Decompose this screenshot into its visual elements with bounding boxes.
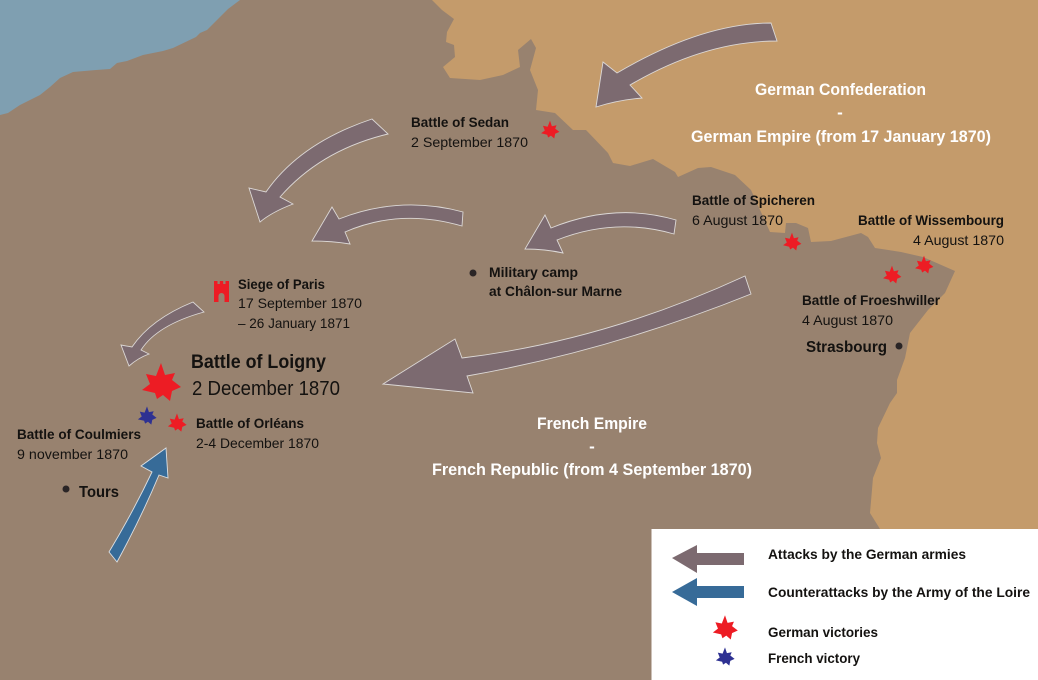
label: Battle of Orléans: Battle of Orléans bbox=[196, 415, 304, 431]
icon: Battle of Froeshwiller star bbox=[883, 266, 901, 283]
label: Battle of Orléans bbox=[196, 415, 319, 451]
label: German Confederation / Empire: German Confederation bbox=[755, 80, 926, 99]
map: sea bbox=[0, 0, 240, 115]
label: German Confederation / Empire bbox=[691, 80, 991, 146]
legend icon: counterattack arrow bbox=[672, 578, 744, 606]
icon: Battle of Coulmiers star bbox=[138, 406, 157, 425]
icon: Battle of Spicheren star bbox=[783, 233, 801, 250]
label: Battle of Coulmiers bbox=[17, 426, 141, 462]
label: Siege of Paris: – 26 January 1871 bbox=[238, 315, 350, 331]
legend icon: German victories star bbox=[713, 615, 738, 640]
legend text: counterattacks: Counterattacks by the Army of the Loire bbox=[768, 584, 1030, 600]
label: Battle of Wissembourg: Battle of Wissembourg bbox=[858, 212, 1004, 228]
map: German territory bbox=[432, 0, 1038, 529]
label: Strasbourg: Strasbourg bbox=[806, 339, 887, 356]
label: Battle of Froeshwiller bbox=[802, 292, 941, 328]
label: Battle of Orléans: 2-4 December 1870 bbox=[196, 435, 319, 451]
label: French Empire / Republic: French Republic (from 4 September 1870) bbox=[432, 460, 752, 479]
label: Siege of Paris: Siege of Paris bbox=[238, 276, 325, 292]
label: French Empire / Republic: - bbox=[589, 437, 595, 456]
label: Battle of Froeshwiller: 4 August 1870 bbox=[802, 312, 893, 328]
label: Battle of Coulmiers: 9 november 1870 bbox=[17, 446, 128, 462]
arrow: attack from Germany towards Sedan bbox=[596, 23, 777, 107]
label: Battle of Loigny: 2 December 1870 bbox=[192, 378, 340, 400]
icon: Paris castle tower bbox=[214, 281, 229, 302]
label: Battle of Sedan: Battle of Sedan bbox=[411, 114, 509, 130]
legend text: French victory: French victory bbox=[768, 650, 860, 666]
legend icon: French victory star bbox=[716, 647, 735, 666]
legend text: German victories: German victories bbox=[768, 624, 878, 640]
arrow: attack from Sedan towards Paris bbox=[249, 119, 388, 222]
label: Tours: Tours bbox=[79, 484, 119, 501]
icon: Battle of Orléans star bbox=[168, 413, 187, 432]
arrow: attack from Spicheren towards Châlon bbox=[525, 213, 676, 253]
icon: Tours dot bbox=[62, 486, 70, 492]
panel: legend bbox=[652, 529, 1038, 680]
icon: Battle of Sedan star bbox=[541, 121, 559, 138]
label: Siege of Paris bbox=[238, 276, 362, 331]
label: French Empire / Republic bbox=[432, 414, 752, 479]
icon: Châlon dot bbox=[470, 270, 476, 276]
label: Siege of Paris: 17 September 1870 bbox=[238, 295, 362, 311]
label: Battle of Wissembourg: 4 August 1870 bbox=[913, 232, 1004, 248]
label: German Confederation / Empire: - bbox=[837, 103, 843, 122]
arrow: attack from Paris towards Loigny bbox=[121, 302, 204, 366]
label: Battle of Loigny bbox=[191, 352, 340, 400]
icon: Battle of Wissembourg star bbox=[915, 256, 933, 273]
label: Military camp: Military camp bbox=[489, 264, 578, 280]
label: Battle of Spicheren: 6 August 1870 bbox=[692, 212, 783, 228]
label: French Empire / Republic: French Empire bbox=[537, 414, 647, 433]
label: Battle of Sedan: 2 September 1870 bbox=[411, 134, 528, 150]
label: Military camp bbox=[489, 264, 622, 299]
legend text: attacks: Attacks by the German armies bbox=[768, 546, 966, 562]
label: Battle of Froeshwiller: Battle of Froeshwiller bbox=[802, 292, 941, 308]
icon: Battle of Loigny star bbox=[142, 363, 181, 401]
label: Battle of Wissembourg bbox=[858, 212, 1004, 248]
label: Battle of Loigny: Battle of Loigny bbox=[191, 352, 326, 373]
legend icon: German attack arrow bbox=[672, 545, 744, 573]
label: Battle of Sedan bbox=[411, 114, 528, 150]
arrow: main attack from Alsace towards Loigny bbox=[383, 276, 751, 393]
label: German Confederation / Empire: German Empire (from 17 January 1870) bbox=[691, 127, 991, 146]
icon: Strasbourg dot bbox=[896, 342, 902, 350]
arrow: attack from Châlon towards Paris bbox=[312, 205, 463, 244]
arrow: counterattack by the Army of the Loire bbox=[109, 448, 168, 562]
label: Military camp: at Châlon-sur Marne bbox=[489, 283, 622, 299]
label: Battle of Spicheren bbox=[692, 192, 815, 228]
label: Battle of Spicheren: Battle of Spicheren bbox=[692, 192, 815, 208]
label: Battle of Coulmiers: Battle of Coulmiers bbox=[17, 426, 141, 442]
